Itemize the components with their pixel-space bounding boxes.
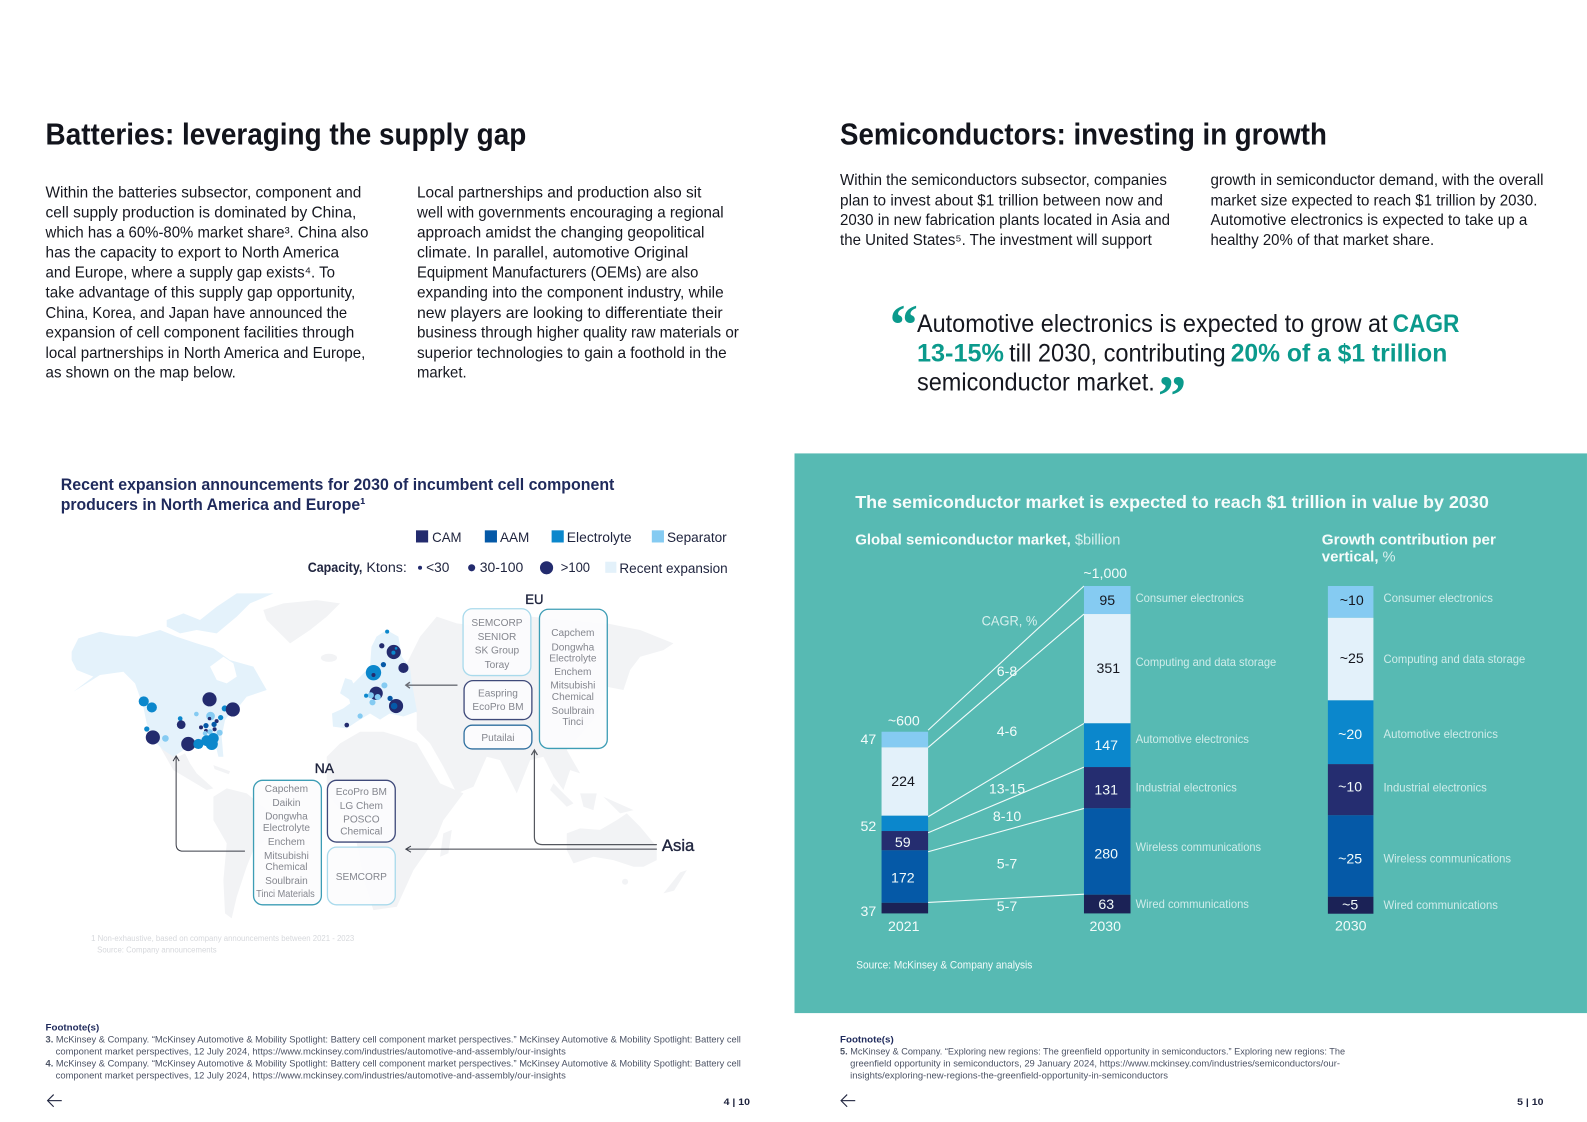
map footnote (91, 934, 355, 954)
map heading (61, 475, 615, 514)
chart: growth contribution stacked bar: ~5 (1342, 897, 1358, 913)
legend: components (416, 530, 727, 546)
box: NA CAM companies: LG Chem (340, 801, 383, 812)
world map (72, 593, 687, 918)
bar: 2030 (1083, 566, 1131, 935)
text block: batteries column 2: superior technologies to gain a foothold in the (417, 345, 727, 362)
text block: batteries column 1: cell supply production is dominated by China, (46, 205, 356, 222)
icon: back arrow right page (841, 1095, 855, 1107)
vertical labels: Consumer electronics (1384, 592, 1493, 605)
box: EU electrolyte companies: Mitsubishi (550, 681, 595, 692)
text block: semiconductors column 2: Automotive electronics is expected to take up a (1210, 212, 1528, 229)
text block: batteries column 1: China, Korea, and Japan have announced the (46, 305, 347, 322)
vertical labels: Consumer electronics (1136, 592, 1244, 605)
footnotes: batteries (46, 1022, 741, 1080)
bar: 2030: 131 (1094, 782, 1118, 798)
legend: capacity: >100 (561, 560, 590, 576)
text block: semiconductors column 1 (840, 172, 1170, 249)
panel heading: The semiconductor market is expected to reach $1 trillion in value by 2030 (855, 492, 1489, 512)
box: EU electrolyte companies: Electrolyte (549, 653, 597, 664)
legend: components: AAM (500, 530, 529, 546)
label: Asia: Asia (662, 837, 694, 855)
box: NA electrolyte companies: Electrolyte (263, 823, 310, 834)
box: NA electrolyte companies: Tinci Materials (256, 889, 315, 900)
box: EU CAM companies: Easpring (478, 688, 518, 699)
legend: capacity: Capacity, (308, 560, 362, 576)
box: NA electrolyte companies: Mitsubishi (264, 851, 309, 862)
box: EU electrolyte companies: Chemical (552, 692, 594, 703)
map footnote: Source: Company announcements (97, 945, 217, 954)
vertical labels: Wireless communications (1384, 852, 1511, 865)
connector lines and CAGR values: 5-7 (997, 856, 1017, 872)
page number right: 5 | 10 (1517, 1097, 1543, 1108)
box: EU CAM companies: EcoPro BM (472, 702, 524, 713)
chart: growth contribution stacked bar: 2030 (1335, 919, 1367, 935)
map heading: Recent expansion announcements for 2030 of incumbent cell component (61, 475, 615, 494)
connector lines and CAGR values: 5-7 (997, 899, 1017, 915)
chart heading: growth contribution: Growth contribution per (1322, 533, 1496, 549)
chart heading: global market: Global semiconductor market, (855, 533, 1071, 549)
box: EU AAM company (464, 725, 532, 749)
text block: semiconductors column 1: the United States⁵. The investment will support (840, 232, 1152, 249)
text block: semiconductors column 2: growth in semiconductor demand, with the overall (1210, 172, 1543, 189)
box: EU separator companies (463, 609, 531, 676)
text block: batteries column 2: climate. In parallel, automotive Original (417, 245, 688, 262)
bar: 2021: ~600 (888, 714, 920, 730)
box: NA electrolyte companies: Daikin (272, 798, 300, 809)
text block: batteries column 2: new players are looking to differentiate their (417, 305, 723, 322)
map heading: producers in North America and Europe¹ (61, 495, 366, 514)
text block: batteries column 1: take advantage of this supply gap opportunity, (46, 285, 355, 302)
vertical labels (1136, 592, 1276, 911)
bar: 2021: 172 (891, 871, 915, 887)
panel: semiconductor market (795, 453, 1587, 1013)
chart heading: growth contribution: % (1383, 550, 1396, 566)
bar: 2030: 95 (1099, 593, 1115, 609)
legend: capacity: 30-100 (480, 560, 523, 576)
callout: quote (890, 295, 1459, 428)
arrow: Asia to NA box (406, 846, 657, 852)
vertical labels: Wired communications (1136, 898, 1249, 911)
icon: opening quote mark: “ (890, 295, 918, 357)
legend: components: Electrolyte (567, 530, 632, 546)
chart: growth contribution stacked bar: ~10 (1338, 779, 1362, 795)
box: EU separator companies: SEMCORP (471, 618, 523, 629)
box: EU electrolyte companies (539, 609, 607, 748)
arrow: NA box to North America (173, 756, 245, 851)
page number left: 4 | 10 (724, 1097, 750, 1108)
box: EU separator companies: Toray (485, 660, 510, 671)
label: NA: NA (315, 761, 335, 777)
bar: 2030: 147 (1094, 738, 1118, 754)
chart: growth contribution stacked bar: ~25 (1340, 651, 1364, 667)
text block: batteries column 2: Equipment Manufacturers (OEMs) are also (417, 264, 698, 281)
bar: 2021: 52 (861, 819, 876, 835)
footnotes: semiconductors: insights/exploring-new-regions-the-greenfield-opportunity-in-semiconductors (850, 1070, 1168, 1080)
text block: batteries column 1: as shown on the map below. (46, 365, 236, 382)
chart: growth contribution stacked bar: ~20 (1338, 727, 1362, 743)
panel: expansion map (61, 475, 728, 954)
dots: North America facilities (139, 692, 240, 751)
chart heading: growth contribution (1322, 533, 1496, 566)
bar: 2030: 351 (1096, 661, 1120, 677)
box: NA separator company: SEMCORP (336, 872, 387, 883)
text block: batteries column 1: has the capacity to export to North America (46, 245, 340, 262)
text block: batteries column 2: market. (417, 365, 467, 382)
text block: semiconductors column 2: healthy 20% of that market share. (1210, 232, 1434, 249)
vertical labels: Wireless communications (1136, 841, 1261, 854)
connector lines and CAGR values: 8-10 (993, 809, 1021, 825)
bar: 2021 (861, 714, 928, 935)
text block: batteries column 1 (45, 184, 368, 382)
bar: 2021: 224 (891, 774, 915, 790)
box: NA electrolyte companies: Capchem (265, 784, 308, 795)
bar: 2030: ~1,000 (1083, 566, 1127, 582)
label: EU: EU (525, 592, 544, 608)
legend: capacity: Ktons: (366, 560, 407, 576)
source note: Source: McKinsey & Company analysis (856, 960, 1032, 972)
bar: 2030: 280 (1094, 846, 1118, 862)
box: EU separator companies: SK Group (475, 645, 520, 656)
callout: quote: CAGR (1393, 310, 1459, 338)
text block: batteries column 1: Within the batteries subsector, component and (46, 184, 361, 201)
chart: growth contribution stacked bar: ~25 (1338, 851, 1362, 867)
box: NA electrolyte companies: Chemical (265, 862, 308, 873)
text block: semiconductors column 1: 2030 in new fabrication plants located in Asia and (840, 212, 1170, 229)
connector lines and CAGR values: 13-15 (989, 781, 1025, 797)
footnotes: batteries: component market perspectives, 12 July 2024, https://www.mckinsey.com/industries/automotive-and-assembly/our-insights (56, 1047, 566, 1057)
vertical labels: Automotive electronics (1384, 728, 1498, 741)
text block: batteries column 2: approach amidst the changing geopolitical (417, 224, 704, 241)
callout: quote: Automotive electronics is expected to grow at (917, 310, 1388, 338)
text block: batteries column 2: well with governments encouraging a regional (416, 205, 724, 222)
bar: 2021: 37 (861, 904, 876, 920)
legend: components: Separator (667, 530, 727, 546)
footnotes: semiconductors: Footnote(s) (840, 1034, 894, 1044)
bar: 2021: 2021 (888, 919, 920, 935)
vertical labels: Industrial electronics (1384, 781, 1487, 794)
box: EU separator companies: SENIOR (478, 632, 516, 643)
text block: semiconductors column 2: market size expected to reach $1 trillion by 2030. (1210, 192, 1537, 209)
title: batteries: Batteries: leveraging the supply gap (46, 119, 526, 152)
legend: capacity: <30 (426, 560, 450, 576)
icon: back arrow left page (48, 1095, 62, 1107)
legend: capacity: Recent expansion (619, 561, 728, 577)
box: NA CAM companies: EcoPro BM (336, 787, 387, 798)
callout: quote: till 2030, contributing (1009, 339, 1226, 367)
callout: quote: semiconductor market. (917, 369, 1155, 397)
bar: 2021: 59 (895, 835, 911, 851)
chart heading: global market: $billion (1075, 533, 1120, 549)
text block: batteries column 1: and Europe, where a supply gap exists⁴. To (46, 264, 335, 281)
chart: growth contribution stacked bar: ~10 (1340, 593, 1364, 609)
vertical labels: Industrial electronics (1136, 781, 1237, 794)
legend: components: CAM (432, 530, 462, 546)
connector lines and CAGR values: CAGR, % (982, 613, 1038, 629)
vertical labels: Wired communications (1384, 899, 1498, 912)
bar: 2021: 47 (861, 732, 876, 748)
footnotes: batteries: 4. McKinsey & Company. “McKinsey Automotive & Mobility Spotlight: Battery cell component market perspectives.” McKinsey Automotive & Mobility Spotlight: Battery cell (46, 1059, 741, 1069)
map footnote: 1 Non-exhaustive, based on company announcements between 2021 - 2023 (91, 934, 355, 943)
bar: 2030: 2030 (1089, 919, 1121, 935)
text block: batteries column 1: local partnerships in North America and Europe, (46, 345, 365, 362)
box: EU electrolyte companies: Enchem (554, 667, 591, 678)
box: EU CAM companies (464, 681, 532, 720)
connector lines and CAGR values: 4-6 (997, 724, 1017, 740)
connector lines and CAGR values (928, 586, 1084, 915)
chart: global semiconductor market stacked bars (861, 566, 1276, 935)
vertical labels: Computing and data storage (1384, 653, 1525, 666)
footnotes: batteries: component market perspectives, 12 July 2024, https://www.mckinsey.com/industries/automotive-and-assembly/our-insights (56, 1070, 566, 1080)
dots: Europe facilities (344, 630, 409, 727)
legend: capacity (308, 560, 728, 577)
box: NA electrolyte companies: Soulbrain (265, 876, 308, 887)
text block: batteries column 2: expanding into the component industry, while (417, 285, 724, 302)
box: NA CAM companies: POSCO (343, 814, 380, 825)
box: EU electrolyte companies: Soulbrain (552, 706, 594, 717)
arrow: Asia to EU box (531, 750, 657, 845)
box: NA electrolyte companies: Enchem (268, 837, 305, 848)
text block: batteries column 1: expansion of cell component facilities through (46, 325, 354, 342)
title: semiconductors: Semiconductors: investing in growth (840, 119, 1327, 152)
chart: growth contribution stacked bar (1328, 586, 1525, 935)
footnotes: batteries: 3. McKinsey & Company. “McKinsey Automotive & Mobility Spotlight: Battery cell component market perspectives.” McKinsey Automotive & Mobility Spotlight: Battery cell (46, 1034, 741, 1044)
callout: quote: 20% of a $1 trillion (1231, 339, 1447, 367)
text block: semiconductors column 1: Within the semiconductors subsector, companies (840, 172, 1167, 189)
connector lines and CAGR values: 6-8 (997, 664, 1017, 680)
box: NA electrolyte companies (254, 780, 321, 905)
footnotes: semiconductors: greenfield opportunity in semiconductors, 29 January 2024, https://www.mckinsey.com/industries/semiconductors/our- (850, 1059, 1340, 1069)
box: EU electrolyte companies: Tinci (562, 717, 583, 728)
box: NA electrolyte companies: Dongwha (265, 811, 308, 822)
footnotes: semiconductors: 5. McKinsey & Company. “Exploring new regions: The greenfield opportunity in semiconductors.” Exploring new regions: The (840, 1047, 1345, 1057)
footnotes: batteries: Footnote(s) (46, 1022, 99, 1032)
vertical labels: Computing and data storage (1136, 656, 1276, 669)
vertical labels: Automotive electronics (1136, 733, 1249, 746)
vertical labels (1384, 592, 1525, 912)
text block: batteries column 1: which has a 60%-80% market share³. China also (45, 224, 368, 241)
box: EU electrolyte companies: Capchem (551, 628, 595, 639)
box: NA CAM companies (327, 780, 395, 842)
box: NA CAM companies: Chemical (340, 826, 382, 837)
callout: quote: 13-15% (917, 339, 1004, 367)
text block: semiconductors column 2 (1210, 172, 1543, 249)
text block: batteries column 2: business through higher quality raw materials or (417, 325, 739, 342)
footnotes: semiconductors (840, 1034, 1345, 1080)
text block: batteries column 2 (416, 184, 739, 382)
bar: 2030: 63 (1098, 897, 1114, 913)
text block: semiconductors column 1: plan to invest about $1 trillion between now and (840, 192, 1163, 209)
box: EU AAM company: Putailai (481, 733, 515, 744)
chart heading: growth contribution: vertical, (1322, 550, 1378, 566)
box: EU electrolyte companies: Dongwha (552, 642, 595, 653)
arrow: to Europe (406, 682, 457, 688)
text block: batteries column 2: Local partnerships and production also sit (417, 184, 702, 201)
icon: closing quote mark: ” (1158, 366, 1186, 428)
box: NA separator company (327, 847, 395, 905)
